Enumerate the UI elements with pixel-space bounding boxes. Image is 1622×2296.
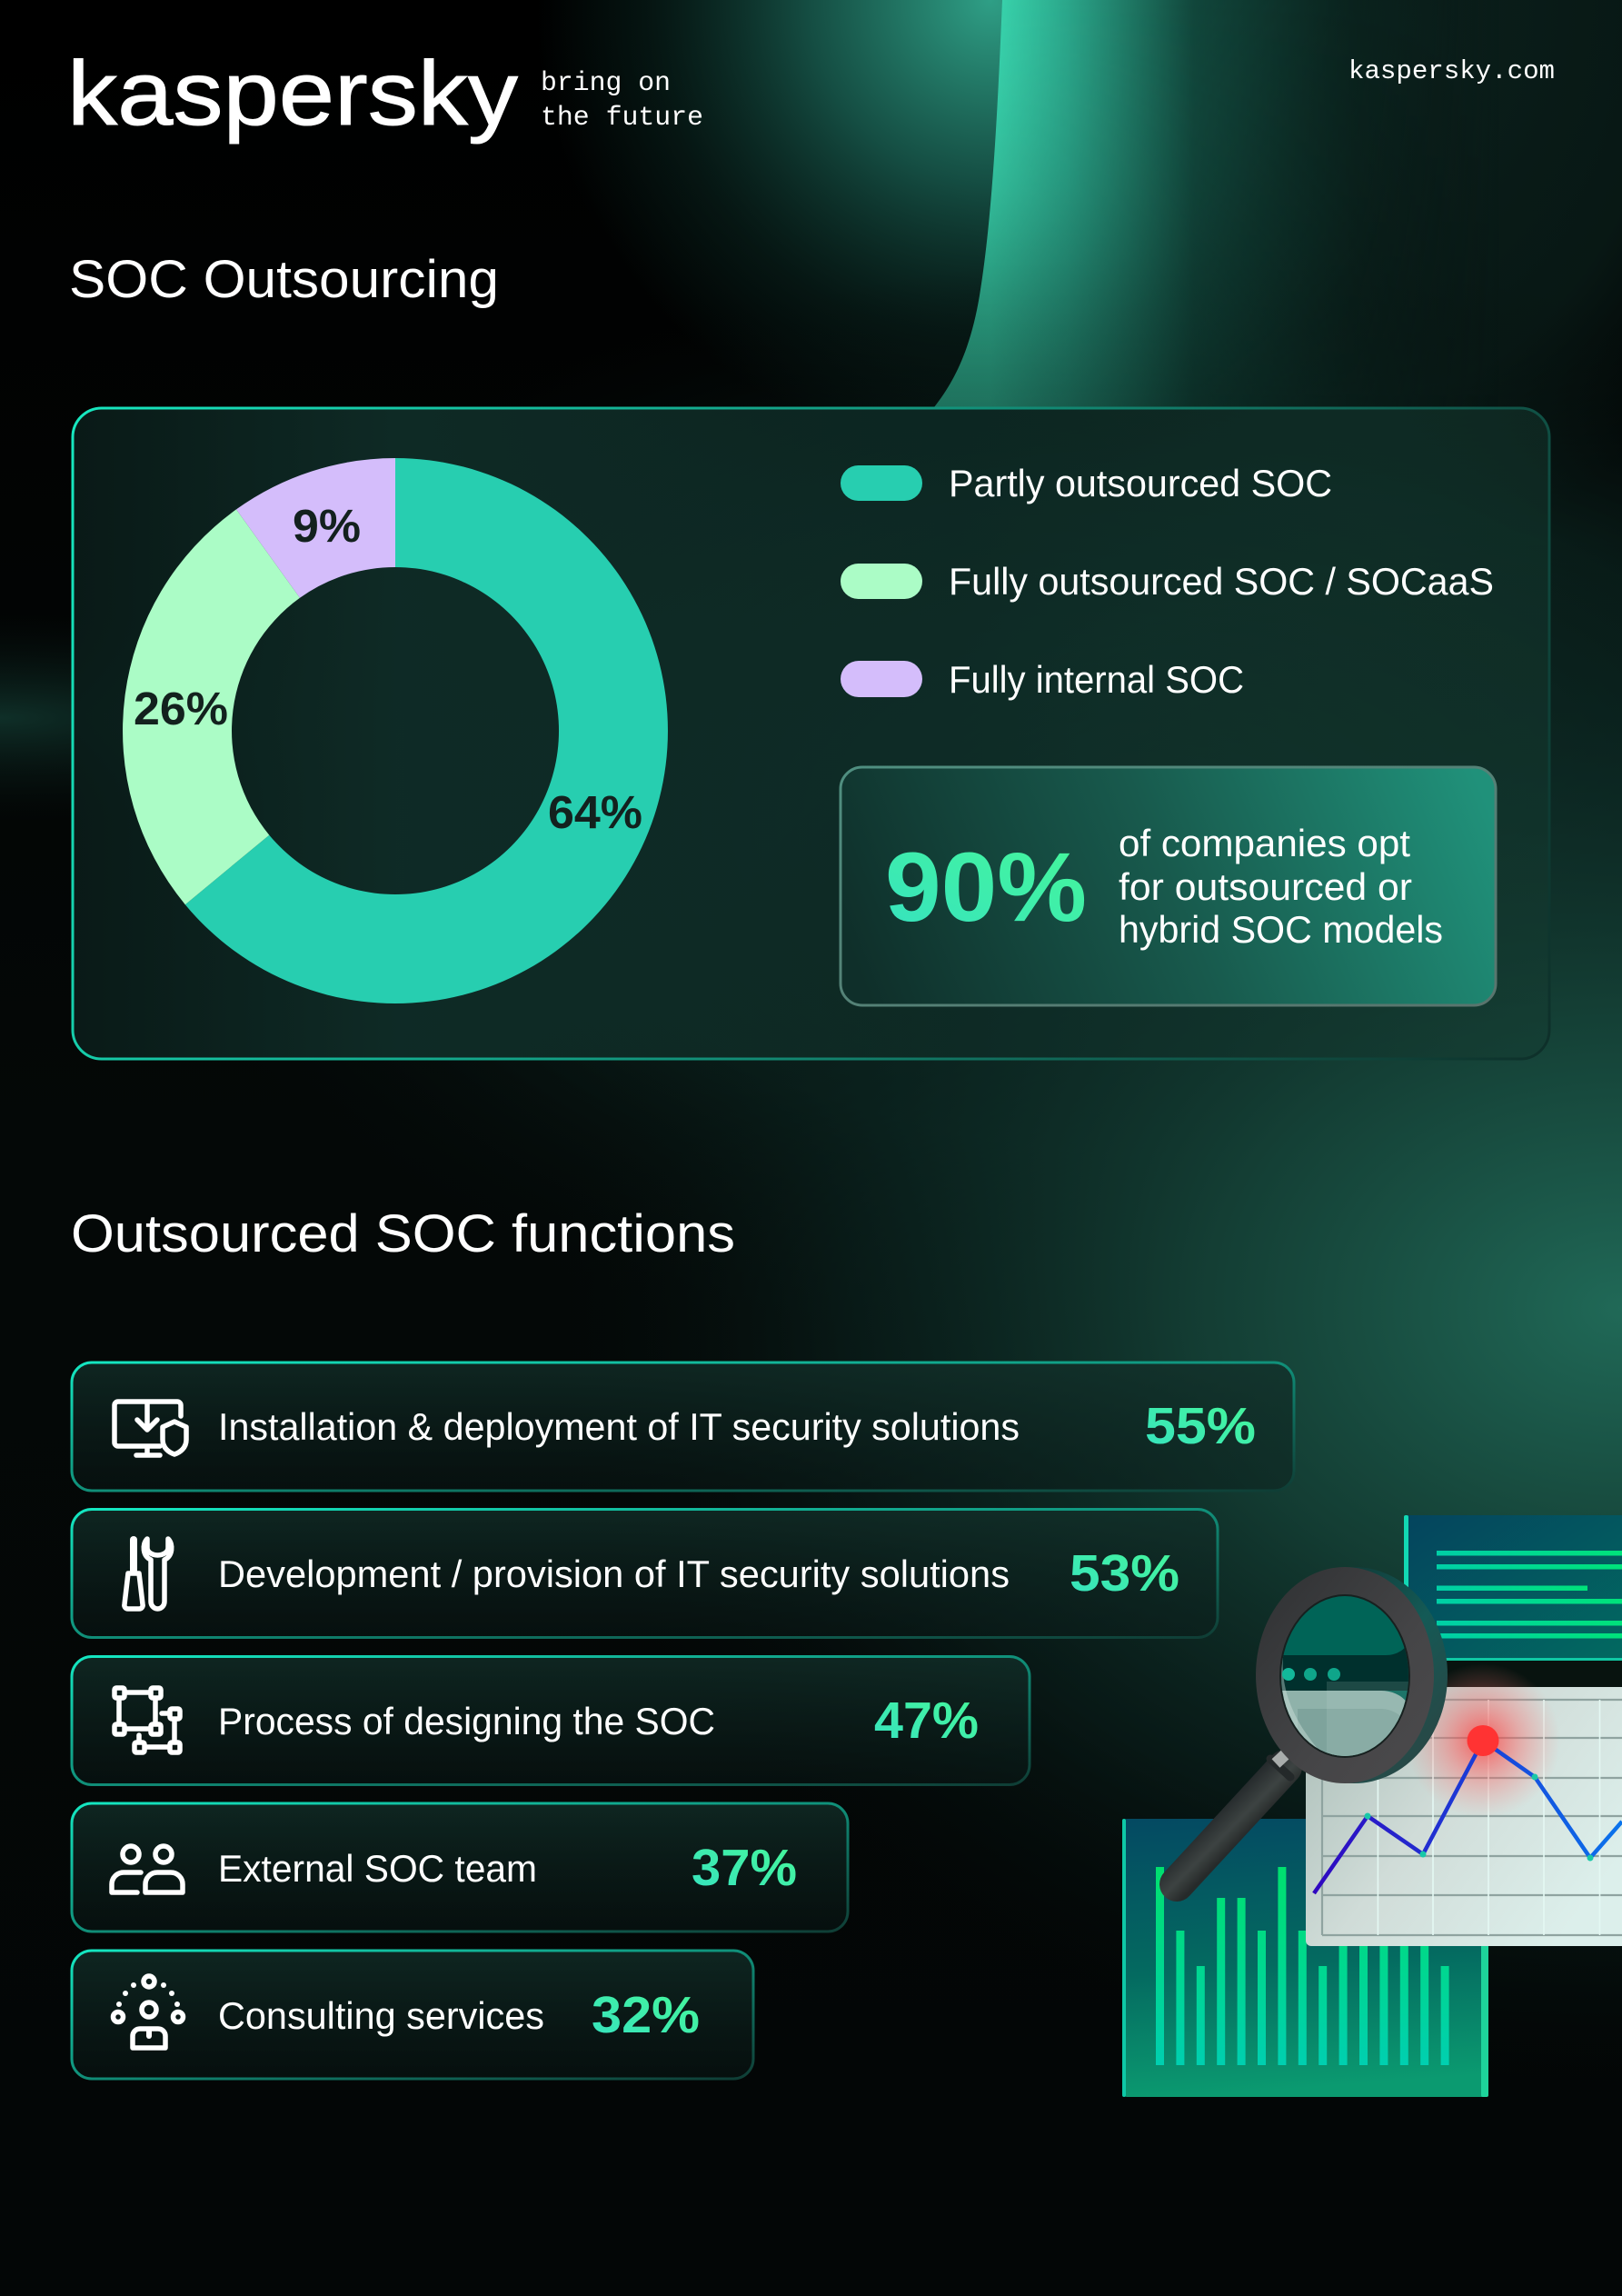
callout: 90%: hybrid SOC models (1119, 908, 1443, 951)
icon: node diagram (114, 1688, 180, 1752)
legend (841, 462, 1494, 701)
shadow under top panel (1418, 1661, 1622, 1688)
bar: development and provision: 53% (1070, 1544, 1179, 1602)
donut chart (123, 458, 668, 1003)
bar: consulting services: 32% (592, 1986, 700, 2044)
bar: external SOC team: External SOC team (218, 1847, 537, 1890)
icon: two people (112, 1846, 183, 1892)
bar: consulting services (72, 1951, 753, 2079)
icon: consultant with surrounding dots (113, 1976, 184, 2048)
callout: 90%: 90% (885, 832, 1087, 942)
heading: Outsourced SOC functions: Outsourced SOC functions (71, 1204, 735, 1263)
bar: consulting services: Consulting services (218, 1994, 544, 2037)
illustration: data panels and magnifying glass (1122, 1515, 1622, 2097)
bar: development and provision: Development / provision of IT security solutions (218, 1552, 1010, 1595)
tagline: bring on (541, 68, 671, 99)
icon: screwdriver and wrench (124, 1539, 172, 1609)
tagline: the future (541, 103, 703, 134)
legend: Partly outsourced SOC (949, 462, 1332, 504)
legend: Fully outsourced SOC / SOCaaS (949, 560, 1494, 603)
panel: SOC outsourcing split (73, 408, 1549, 1059)
donut chart: 9% (293, 500, 361, 552)
icon: monitor with shield (114, 1402, 186, 1455)
donut chart: 26% (134, 683, 228, 734)
legend: Fully internal SOC (949, 658, 1244, 701)
bar chart panel (1122, 1819, 1488, 2097)
heading: SOC Outsourcing: SOC Outsourcing (69, 250, 499, 309)
bar: installation and deployment (72, 1363, 1294, 1491)
bar: development and provision (72, 1509, 1218, 1638)
bar: installation and deployment: Installation & deployment of IT security solutions (218, 1405, 1020, 1448)
callout: 90%: of companies opt (1119, 822, 1410, 864)
top panel with text lines (1404, 1515, 1622, 1661)
bar: process of designing: Process of designing the SOC (218, 1700, 715, 1742)
bar: external SOC team: 37% (692, 1839, 797, 1897)
tagline (541, 68, 703, 134)
website url: kaspersky.com (1348, 56, 1555, 86)
bar: process of designing: 47% (874, 1692, 979, 1750)
bar: external SOC team (72, 1803, 848, 1932)
callout: 90%: for outsourced or (1119, 865, 1412, 908)
donut chart: 64% (548, 786, 642, 838)
callout: 90% (841, 767, 1496, 1005)
bar: process of designing (72, 1656, 1030, 1785)
line chart panel (1306, 1663, 1622, 1946)
magnifying glass (1177, 1567, 1448, 1884)
bar: installation and deployment: 55% (1145, 1397, 1256, 1455)
logo: kaspersky: kaspersky (67, 43, 518, 145)
